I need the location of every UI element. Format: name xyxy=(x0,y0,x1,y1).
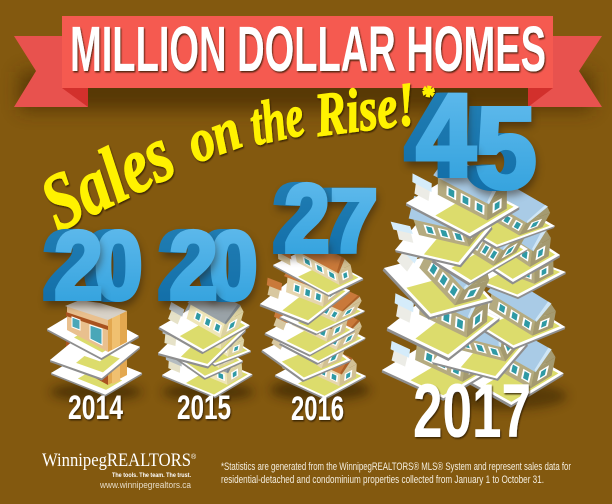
subtitle: the xyxy=(244,82,310,158)
number 27 for 2016: 2 xyxy=(284,164,330,273)
subtitle: Sales xyxy=(27,110,187,248)
2016 house stack xyxy=(241,233,380,401)
2017 house stack xyxy=(357,153,582,410)
2015 house stack xyxy=(138,284,265,401)
number 20 for 2015 xyxy=(169,211,258,320)
WinnipegREALTORS logo xyxy=(42,450,197,490)
number 20 for 2014: 2 xyxy=(54,211,103,320)
number 20 for 2014: 0 xyxy=(94,211,143,320)
2014 house stack xyxy=(45,300,144,401)
number 20 for 2015: 0 xyxy=(209,211,258,320)
year label 2015: 2015 xyxy=(177,389,231,427)
subtitle xyxy=(27,70,435,248)
number 27 for 2016: 7 xyxy=(330,172,378,272)
WinnipegREALTORS logo: www.winnipegrealtors.ca xyxy=(99,480,191,490)
year label 2017: 2017 xyxy=(413,369,531,454)
number 45 for 2017: 5 xyxy=(475,83,537,213)
number 27 for 2016 xyxy=(284,164,378,273)
banner shadow xyxy=(20,72,592,110)
number 20 for 2014 xyxy=(54,211,143,320)
number 45 for 2017 xyxy=(416,70,537,213)
WinnipegREALTORS logo: WinnipegREALTORS xyxy=(42,450,191,471)
number 45 for 2017: 4 xyxy=(416,70,476,202)
WinnipegREALTORS logo: The tools. The team. The trust. xyxy=(112,472,191,479)
subtitle: on xyxy=(178,95,249,175)
number 20 for 2015: 2 xyxy=(169,211,218,320)
year label 2016: 2016 xyxy=(291,390,344,428)
ribbon banner xyxy=(14,16,602,107)
footnote xyxy=(221,461,571,486)
year label 2014: 2014 xyxy=(68,389,123,427)
WinnipegREALTORS logo: ® xyxy=(191,453,197,461)
subtitle: * xyxy=(421,81,435,110)
subtitle: Rise! xyxy=(311,70,419,150)
